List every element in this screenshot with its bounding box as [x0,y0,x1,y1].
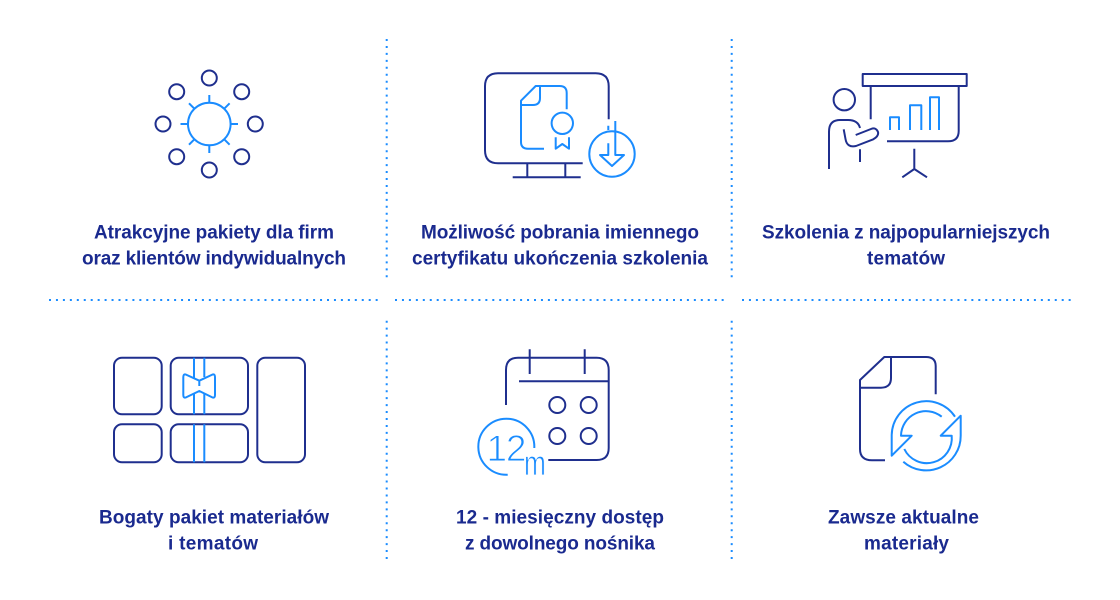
heading: popular training topics [762,222,1050,270]
icon: presenter with chart board [829,74,967,177]
panel: attractive packages [82,70,346,270]
icon: document with sync arrows [860,357,961,470]
heading: rich material package [99,508,329,554]
heading: 12 month access: z dowolnego nośnika [465,534,655,554]
heading: attractive packages: Atrakcyjne pakiety dla firm [94,222,334,244]
heading: 12 month access [456,508,664,554]
icon: monitor with certificate and download arrow [485,73,635,177]
panel: certificate download [412,73,708,270]
panel: rich material package [99,358,329,554]
icon: calendar with 12m badge: 12 [486,428,526,469]
icon: sun with surrounding circles [156,70,263,178]
heading: rich material package: i tematów [168,534,258,554]
heading: popular training topics: Szkolenia z najpopularniejszych [762,222,1050,244]
heading: 12 month access: 12 - miesięczny dostęp [456,508,664,528]
panel: 12 month access [456,349,664,554]
heading: always up to date [828,508,979,554]
heading: certificate download [412,222,708,270]
heading: always up to date: Zawsze aktualne [828,508,979,528]
icon: gift box grid [114,358,305,462]
heading: rich material package: Bogaty pakiet materiałów [99,508,329,528]
heading: attractive packages [82,222,346,270]
heading: popular training topics: tematów [867,248,945,270]
heading: always up to date: materiały [864,534,949,554]
icon: calendar with 12m badge: m [524,443,546,483]
icon: calendar with 12m badge [478,349,609,483]
heading: attractive packages: oraz klientów indywidualnych [82,248,346,270]
panel: popular training topics [762,74,1050,270]
heading: certificate download: Możliwość pobrania imiennego [421,222,699,244]
panel: always up to date [828,357,979,554]
heading: certificate download: certyfikatu ukończenia szkolenia [412,248,708,270]
